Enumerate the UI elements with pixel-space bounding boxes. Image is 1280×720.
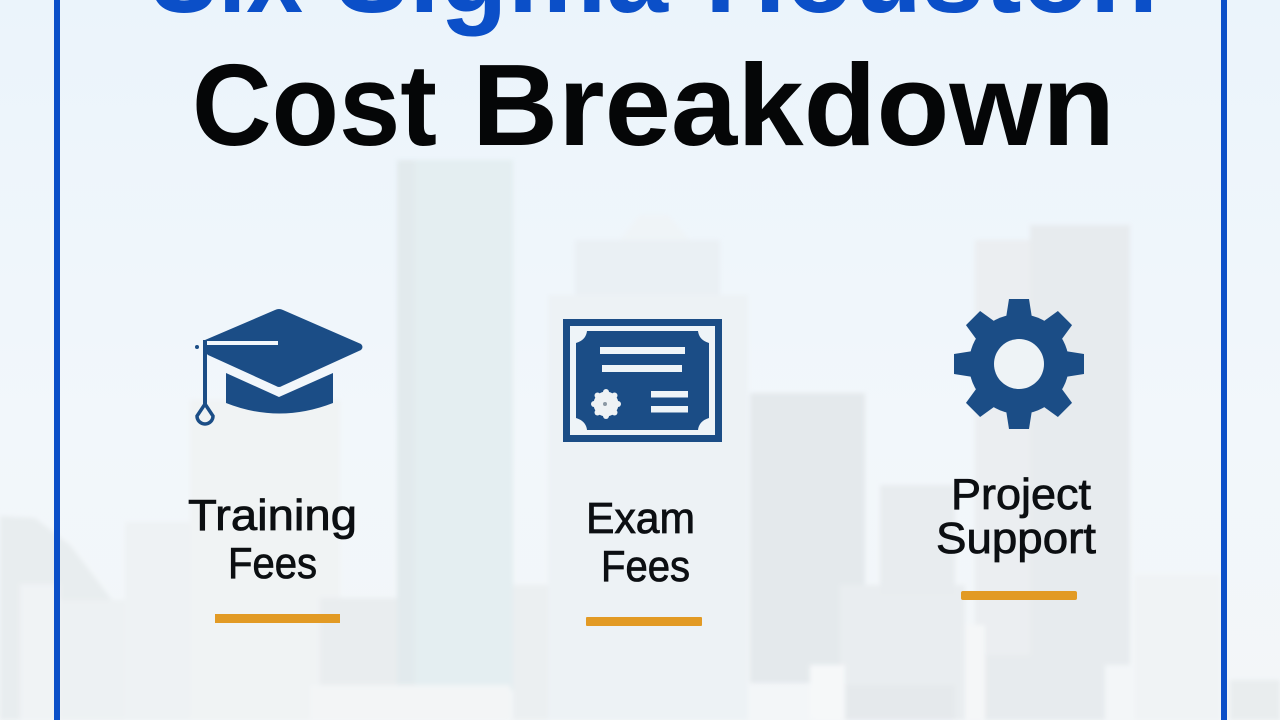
label: Exam Fees: Fees (601, 542, 690, 591)
title: Six Sigma Houston (150, 0, 1158, 37)
icon: certificate (563, 319, 722, 442)
label: Training Fees: Training (188, 491, 357, 540)
accent bar (961, 591, 1077, 600)
hazy Houston skyline (0, 160, 1280, 720)
label: Exam Fees (586, 494, 695, 591)
label: Project Support: Support (936, 514, 1096, 563)
title: Cost Breakdown (192, 40, 1115, 170)
icon: gear (954, 299, 1084, 429)
label: Training Fees: Fees (228, 539, 317, 588)
label: Project Support: Project (951, 470, 1091, 519)
accent bar (586, 617, 702, 626)
column: training fees (188, 309, 362, 623)
title: Cost Breakdown: Cost (192, 40, 437, 170)
label: Exam Fees: Exam (586, 494, 695, 543)
column: project support (936, 299, 1096, 600)
title: Cost Breakdown: Breakdown (472, 40, 1115, 170)
label: Training Fees (188, 491, 357, 588)
label: Project Support (936, 470, 1096, 563)
accent bar (215, 614, 340, 623)
column: exam fees (563, 319, 722, 626)
blue frame: right edge (1221, 0, 1227, 720)
blue frame: left edge (54, 0, 60, 720)
icon: graduation cap (195, 309, 362, 424)
